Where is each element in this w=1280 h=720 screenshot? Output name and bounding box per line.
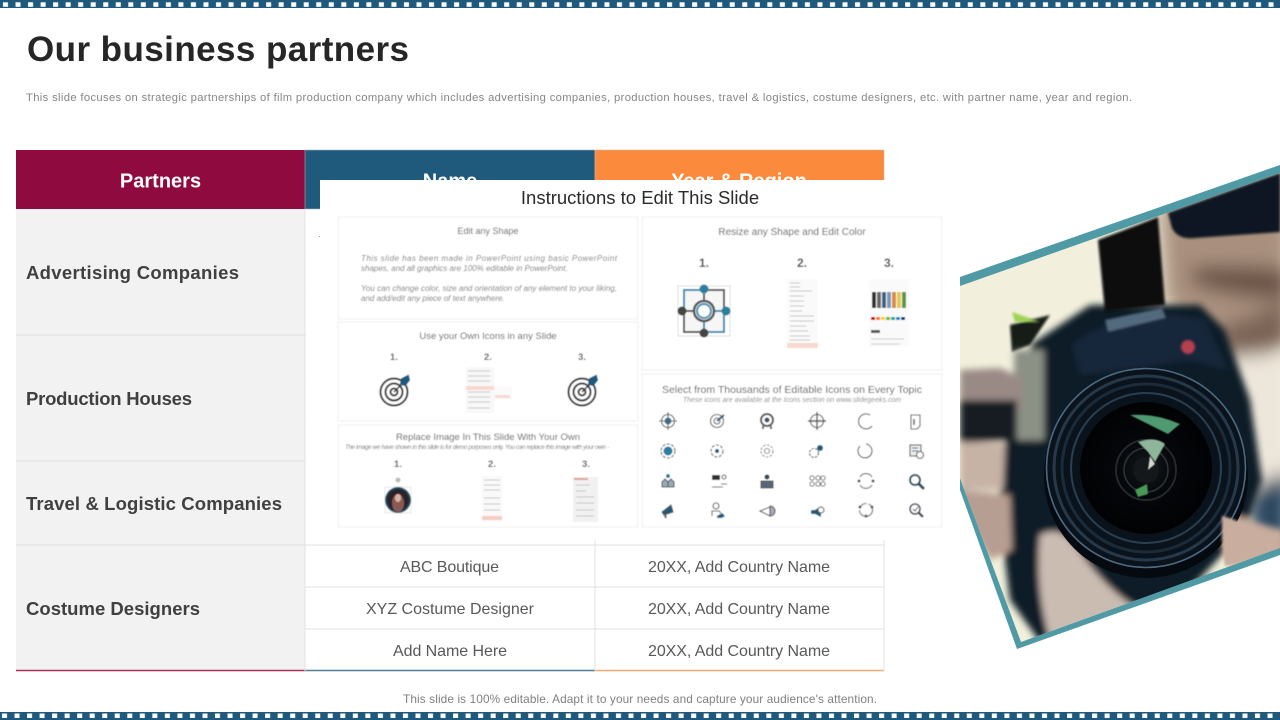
table header: Year and Region [595, 150, 884, 209]
blurred face and neck [1160, 165, 1280, 560]
panel: use your own icons: 2. [484, 352, 492, 363]
camera photograph [960, 165, 1280, 655]
icon grid [659, 412, 924, 518]
panel: edit any shape [338, 217, 638, 319]
partners table [16, 150, 884, 671]
footer note: This slide is 100% editable. Adapt it to your needs and capture your audience's attention. [403, 692, 877, 706]
icon: menu screenshot [787, 279, 818, 348]
camera mount [1098, 217, 1165, 312]
top decorative band [0, 0, 1280, 8]
partner category column [16, 209, 305, 671]
subtitle description: This slide focuses on strategic partnerships of film production company which includes advertising companies, production houses, travel & logistics, costume designers, etc. with partner name, year and region. [26, 92, 1132, 104]
panel: resize any shape [642, 217, 942, 370]
panel: resize any shape: Resize any Shape and Edit Color [718, 227, 866, 238]
table header: Name: Name [423, 170, 477, 192]
row label: travel: Travel & Logistic Companies [26, 493, 282, 514]
blurred background foliage [1010, 315, 1050, 352]
panel: use your own icons [338, 322, 638, 421]
row label: costume: Costume Designers [26, 598, 200, 619]
icon: editable shape [678, 284, 730, 338]
table grid lines [305, 209, 884, 671]
table header: Name [305, 150, 595, 209]
icon: target three [568, 376, 597, 406]
panel: icon library [642, 374, 942, 527]
year cell 1: 20XX, Add Country Name [648, 559, 830, 576]
panel: replace image [338, 425, 638, 527]
blurred camera body [960, 305, 1280, 642]
name cell 1: ABC Boutique [400, 559, 499, 576]
panel: replace image: 2. [488, 459, 496, 470]
panel: replace image: The image we have shown in this slide is for demo purposes only. You can replace this image with your own - [345, 444, 609, 451]
icon: target one [380, 376, 409, 406]
icon: portrait photo [385, 478, 411, 513]
name cell 3: Add Name Here [393, 643, 507, 660]
thumb over lens [1220, 514, 1238, 567]
panel: resize any shape: 1. [699, 256, 709, 270]
overlay heading: Instructions to Edit This Slide [521, 187, 759, 208]
panel: icon library: Select from Thousands of Editable Icons on Every Topic [662, 384, 922, 396]
icon: context menu [466, 367, 512, 413]
instructions overlay [306, 180, 942, 540]
panel: use your own icons: 3. [578, 352, 586, 363]
table header: Year and Region: Year & Region [671, 170, 807, 192]
icon: colour palette [869, 279, 909, 347]
table bottom accent lines [16, 670, 884, 672]
panel: replace image: Replace Image In This Slide With Your Own [396, 432, 580, 443]
panel: edit any shape: This slide has been made in PowerPoint using basic PowerPoint [361, 254, 618, 263]
icon: format panel [573, 477, 598, 522]
camera brand [1105, 308, 1166, 332]
year cell 3: 20XX, Add Country Name [648, 643, 830, 660]
table rows: costume designer names and years [366, 559, 830, 660]
hidden cell text fragment: . [318, 229, 321, 239]
panel: resize any shape: 3. [884, 256, 894, 270]
panel: edit any shape: shapes, and all graphics are 100% editable in PowerPoint. [361, 264, 568, 273]
table header: Partners [16, 150, 305, 209]
panel: edit any shape: Edit any Shape [457, 226, 519, 236]
title: Our business partners [27, 30, 409, 69]
row label: advertising: Advertising Companies [26, 262, 239, 283]
icon: context menu replace [482, 476, 502, 522]
panel: edit any shape: You can change color, size and orientation of any element to your liking, [361, 284, 617, 293]
panel: use your own icons: 1. [390, 352, 398, 363]
bottom decorative band [0, 712, 1280, 720]
photo frame [960, 165, 1280, 649]
camera photo with teal frame [960, 165, 1280, 655]
panel: use your own icons: Use your Own Icons in any Slide [419, 331, 557, 342]
panel: icon library: These icons are available at the Icons section on www.slidegeeks.com [683, 397, 901, 404]
name cell 2: XYZ Costume Designer [366, 601, 535, 618]
table vertical continuation [305, 541, 884, 671]
row label: production: Production Houses [26, 388, 192, 409]
table header: Partners: Partners [120, 170, 201, 192]
lens barrel [1044, 368, 1248, 578]
panel: resize any shape: 2. [797, 256, 807, 270]
camera top arm [1168, 173, 1280, 238]
red badge [1181, 340, 1195, 354]
panel: replace image: 3. [582, 459, 590, 470]
panel: replace image: 1. [394, 459, 402, 470]
panel: edit any shape: and add/edit any piece of text anywhere. [361, 294, 505, 303]
year cell 2: 20XX, Add Country Name [648, 601, 830, 618]
